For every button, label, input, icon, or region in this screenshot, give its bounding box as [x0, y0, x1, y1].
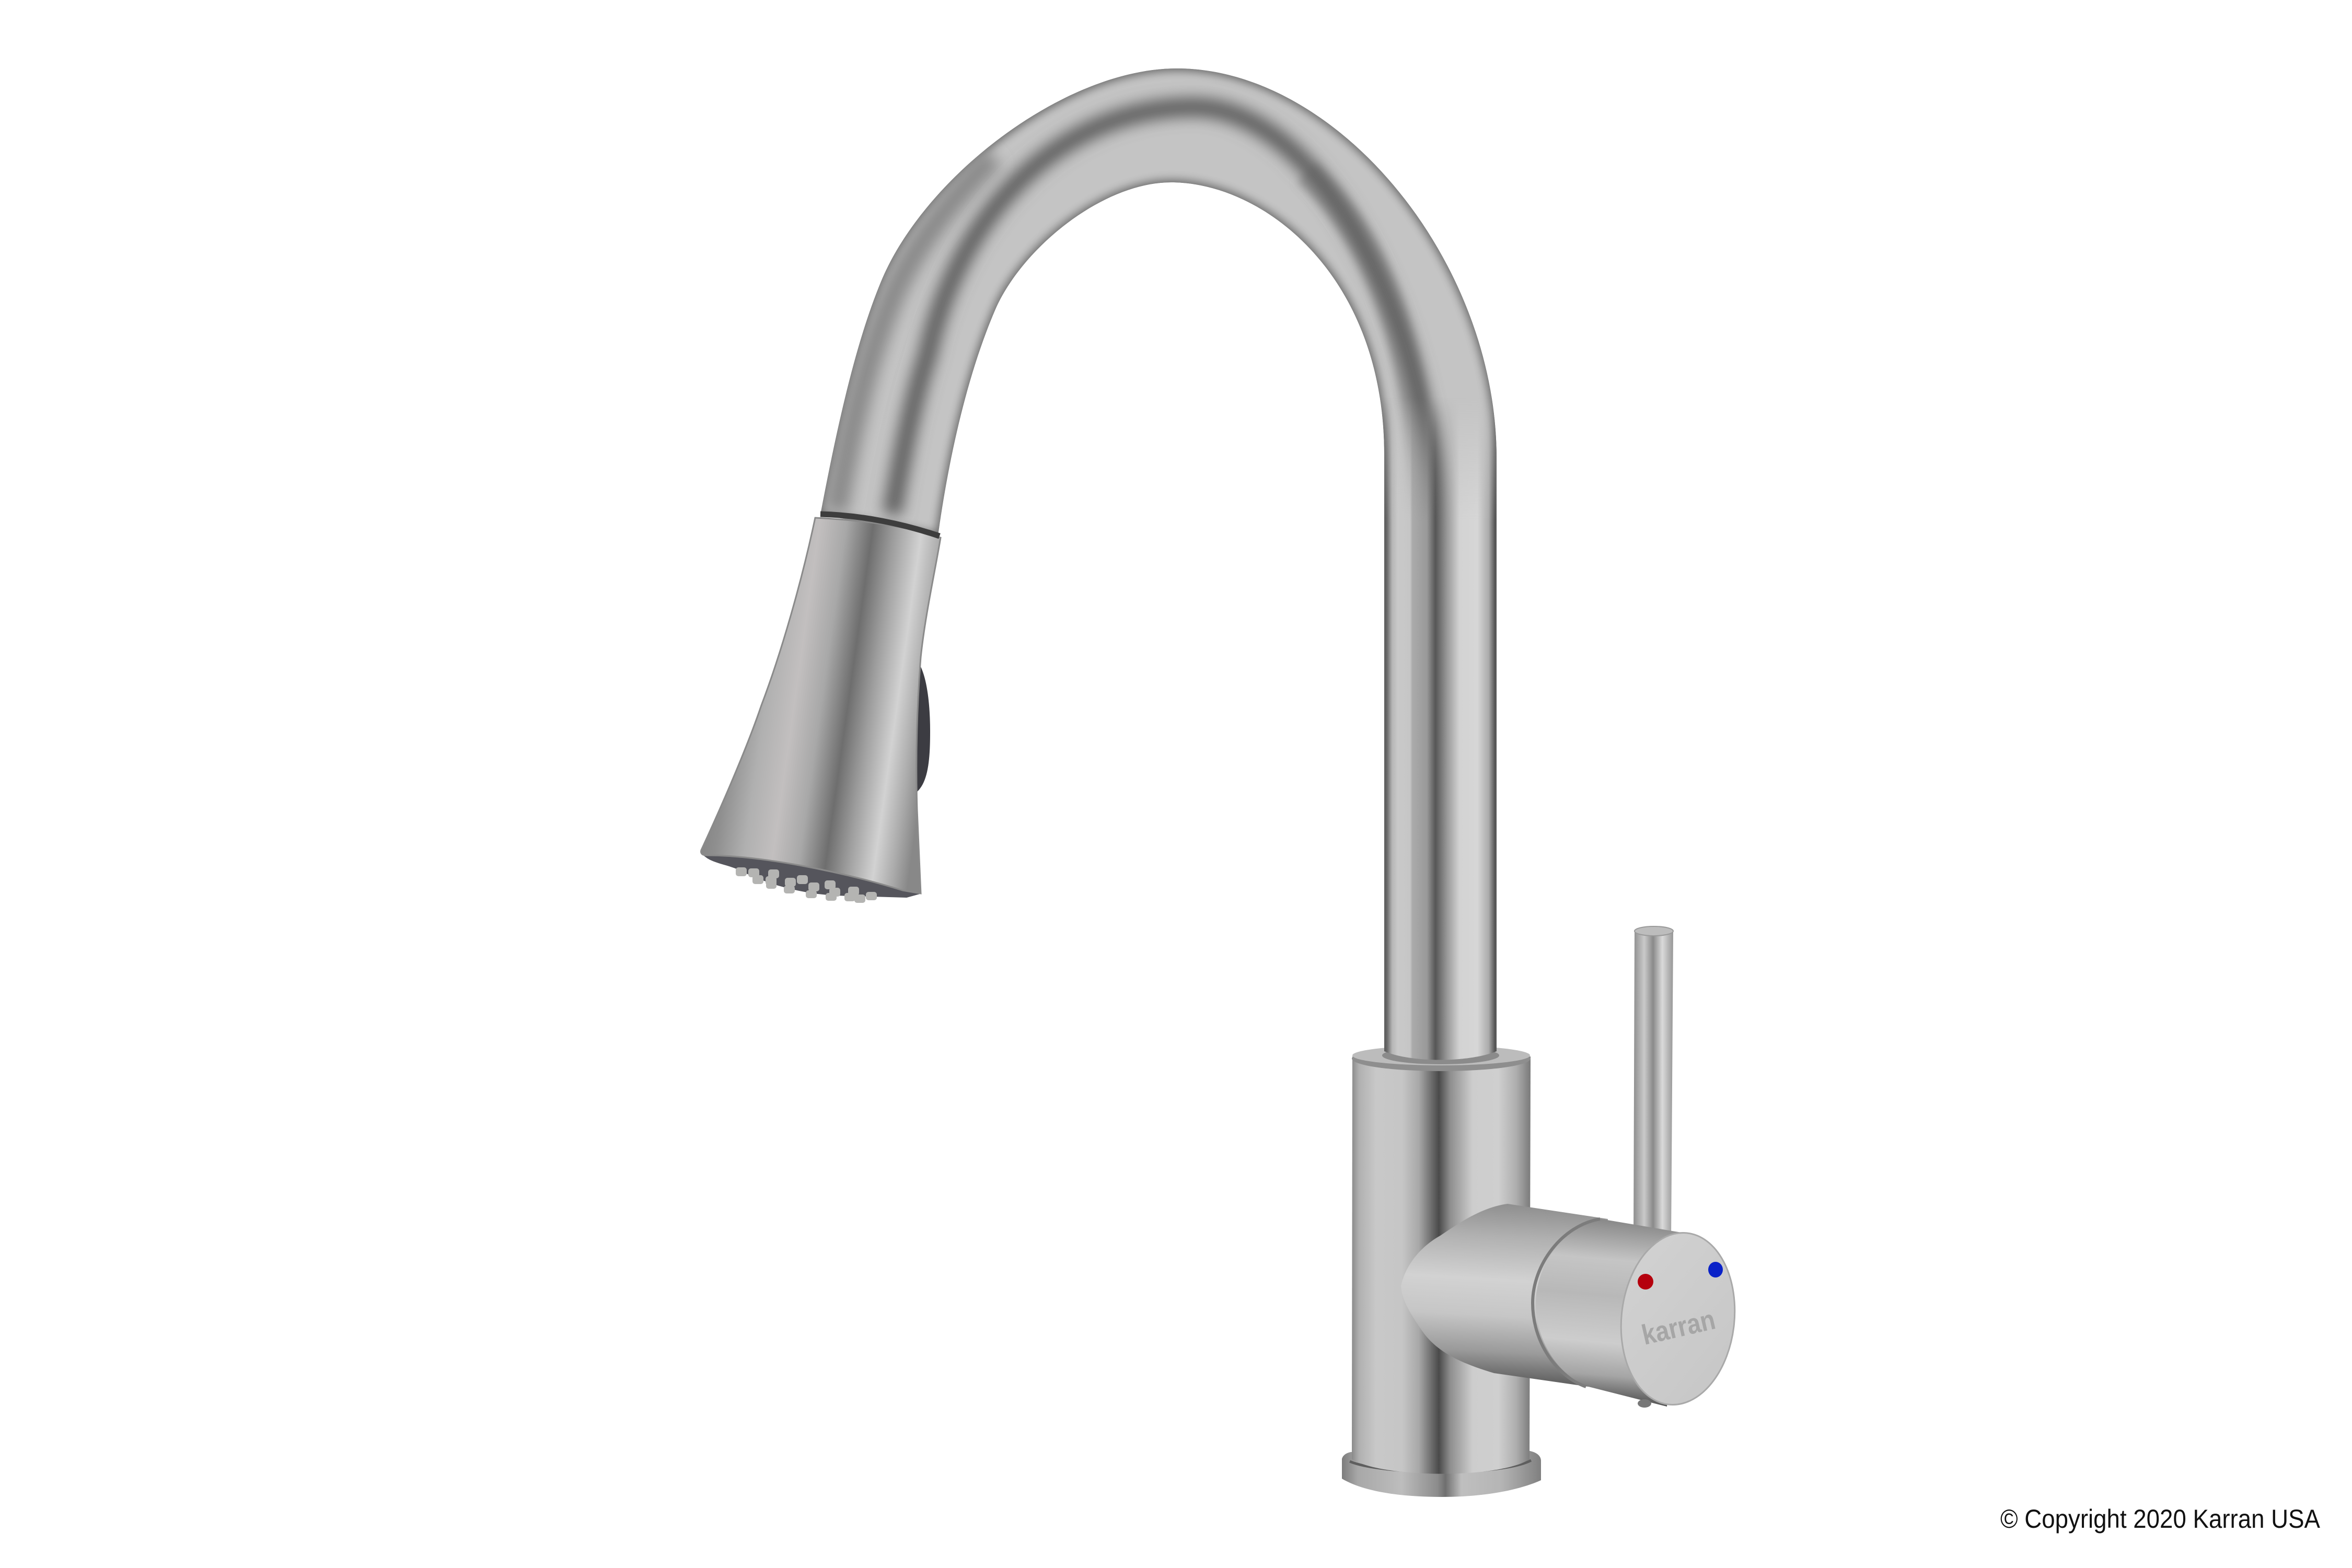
hot indicator	[1638, 1274, 1653, 1290]
nub under cap	[1638, 1399, 1651, 1408]
dark reflection band	[892, 107, 1435, 529]
stepped mid-grey band on right side	[1306, 172, 1422, 529]
end disc	[1613, 1227, 1743, 1410]
gooseneck spout	[820, 68, 1526, 1060]
darker outer-left shading	[836, 157, 993, 512]
cylinder top rim	[1352, 1046, 1531, 1071]
cap seam	[1533, 1219, 1600, 1387]
logo: karran	[1639, 1304, 1718, 1351]
cap cylinder	[1536, 1219, 1682, 1407]
faucet base body	[1342, 1046, 1541, 1497]
spray head	[701, 514, 941, 903]
product image: faucet and copyright	[700, 68, 2320, 1533]
cold indicator	[1708, 1262, 1723, 1277]
neck collar	[1382, 1047, 1499, 1064]
pull-out trigger button	[916, 661, 930, 793]
nozzle face	[701, 853, 922, 903]
seam between spout and head	[820, 514, 940, 536]
lever handle rod	[1633, 926, 1673, 1239]
cylinder	[1352, 1056, 1531, 1474]
copyright notice: © Copyright 2020 Karran USA	[2000, 1504, 2321, 1534]
handle cap	[1533, 1219, 1743, 1410]
faucet	[701, 68, 1743, 1497]
lower straight neck	[1384, 522, 1497, 1060]
valve arm	[1401, 1204, 1608, 1387]
fade into straight neck shading	[1383, 410, 1497, 522]
head body	[701, 518, 941, 893]
mounting flange	[1342, 1451, 1541, 1497]
